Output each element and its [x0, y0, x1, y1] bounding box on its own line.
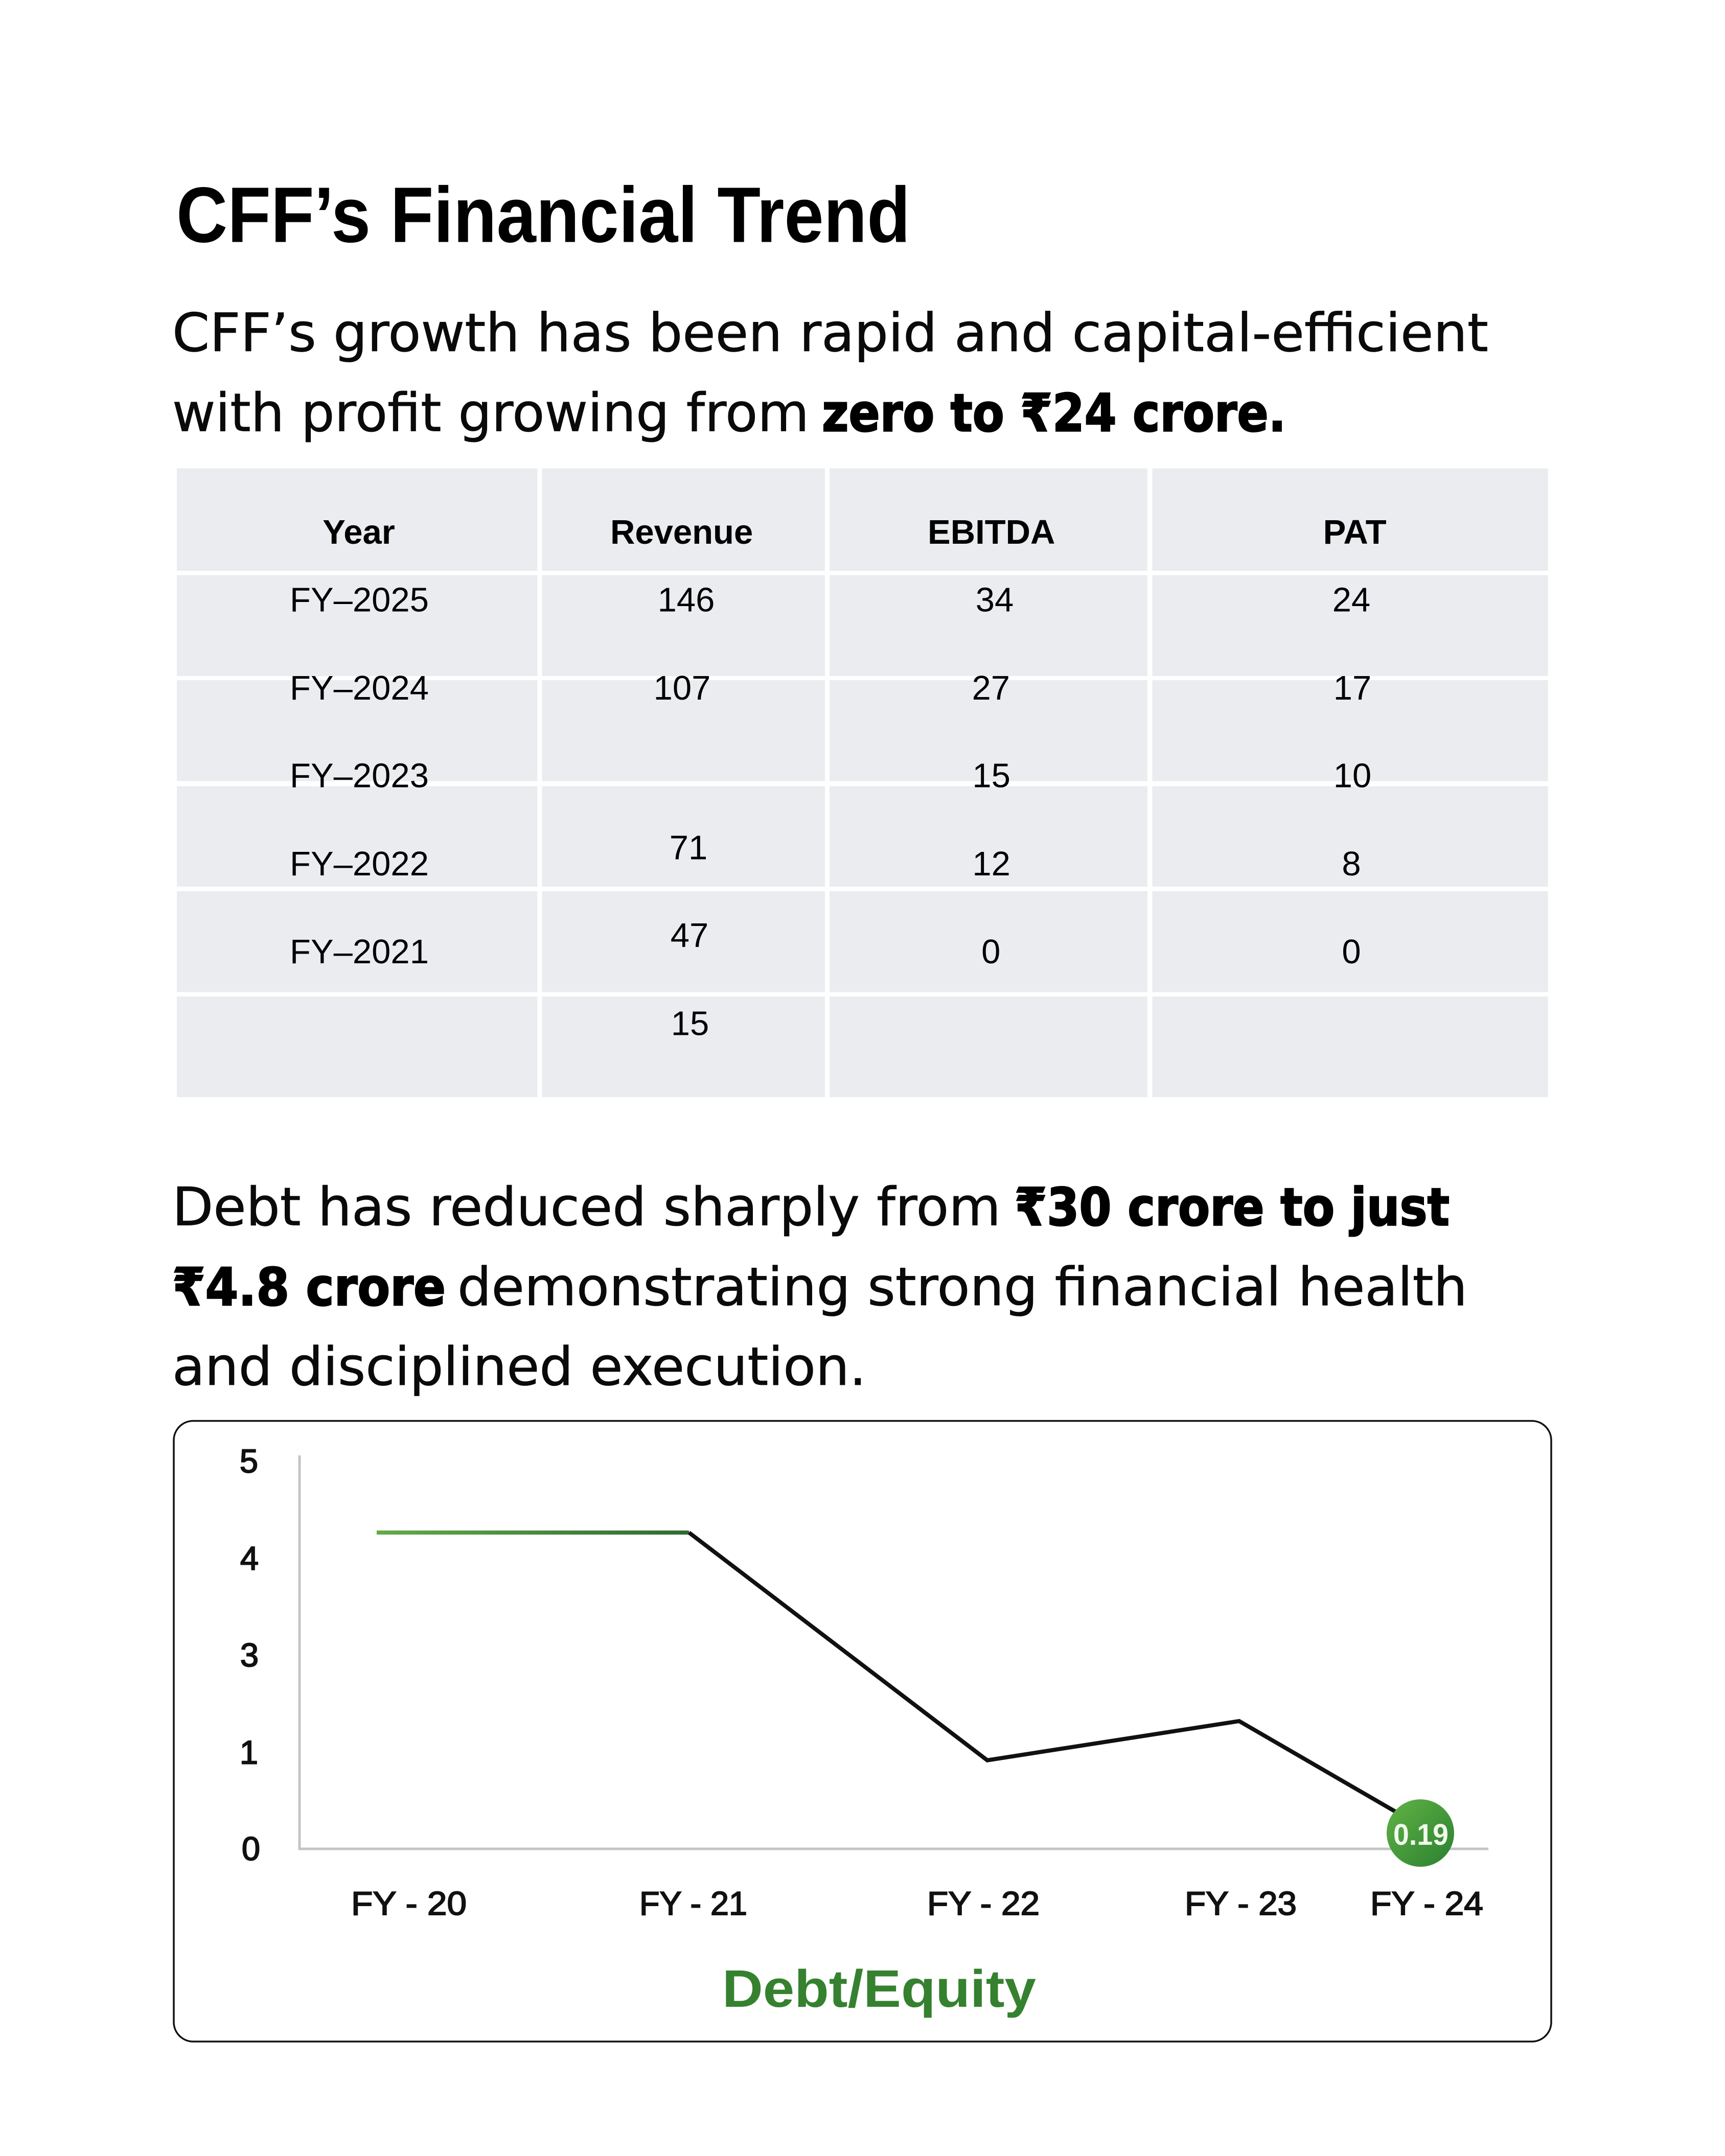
intro paragraph: zero to ₹24 crore. — [822, 383, 1286, 444]
revenue column: 146 — [658, 581, 715, 619]
EBITDA column: 27 — [972, 669, 1010, 707]
debt paragraph: demonstrating strong financial health — [457, 1257, 1467, 1318]
year column: FY–2025 — [290, 581, 429, 619]
table cell backgrounds — [177, 469, 1548, 1097]
y axis labels: 4 — [240, 1540, 259, 1577]
revenue column: 47 — [671, 916, 708, 955]
x axis labels: FY - 22 — [927, 1885, 1040, 1922]
PAT column: 10 — [1333, 757, 1371, 795]
EBITDA column — [972, 581, 1014, 971]
EBITDA column: 15 — [972, 757, 1010, 795]
x axis labels: FY - 20 — [351, 1885, 467, 1922]
highlighted marker 0.19 — [1387, 1799, 1454, 1867]
PAT column — [1332, 581, 1371, 971]
debt paragraph: and disciplined execution. — [172, 1336, 866, 1398]
financial table — [177, 469, 1548, 1097]
green flat line segment — [377, 1531, 689, 1535]
y axis labels — [240, 1443, 260, 1867]
table header row: EBITDA — [928, 513, 1055, 551]
chart title: Debt/Equity — [722, 1959, 1036, 2018]
year column — [290, 581, 429, 971]
table header row — [323, 513, 1387, 551]
table header row: Year — [323, 513, 395, 551]
title: CFF’s Financial Trend — [176, 171, 910, 259]
debt paragraph: ₹4.8 crore — [172, 1257, 446, 1318]
x axis labels: FY - 23 — [1185, 1885, 1297, 1922]
revenue column: 71 — [670, 829, 707, 867]
intro paragraph: CFF’s growth has been rapid and capital-efficient — [172, 303, 1488, 364]
PAT column: 8 — [1342, 845, 1361, 883]
y axis labels: 5 — [240, 1443, 258, 1480]
debt paragraph: Debt has reduced sharply from — [172, 1176, 1001, 1238]
intro paragraph — [172, 303, 1488, 444]
EBITDA column: 12 — [972, 845, 1010, 883]
EBITDA column: 34 — [976, 581, 1014, 619]
year column: FY–2024 — [290, 669, 429, 707]
revenue column — [654, 581, 715, 1043]
chart axes — [300, 1455, 1488, 1849]
x axis labels — [351, 1885, 1483, 1922]
x axis labels: FY - 24 — [1370, 1885, 1483, 1922]
y axis labels: 0 — [242, 1830, 260, 1867]
panel: debt/equity chart — [174, 1421, 1551, 2042]
PAT column: 17 — [1333, 669, 1371, 707]
debt paragraph — [172, 1176, 1467, 1398]
table header row: Revenue — [610, 513, 753, 551]
intro paragraph: with profit growing from — [172, 382, 809, 444]
black trend line — [689, 1533, 1395, 1812]
table header row: PAT — [1323, 513, 1387, 551]
PAT column: 0 — [1342, 933, 1361, 971]
PAT column: 24 — [1332, 581, 1370, 619]
chart frame — [174, 1421, 1551, 2042]
year column: FY–2023 — [290, 757, 429, 795]
revenue column: 15 — [671, 1005, 709, 1043]
x axis labels: FY - 21 — [639, 1885, 747, 1922]
debt paragraph: ₹30 crore to just — [1015, 1177, 1450, 1238]
y axis labels: 1 — [240, 1734, 258, 1771]
revenue column: 107 — [654, 669, 710, 707]
year column: FY–2022 — [290, 845, 429, 883]
year column: FY–2021 — [290, 933, 429, 971]
EBITDA column: 0 — [981, 933, 1000, 971]
highlighted marker 0.19: 0.19 — [1393, 1818, 1448, 1851]
y axis labels: 3 — [240, 1636, 259, 1674]
